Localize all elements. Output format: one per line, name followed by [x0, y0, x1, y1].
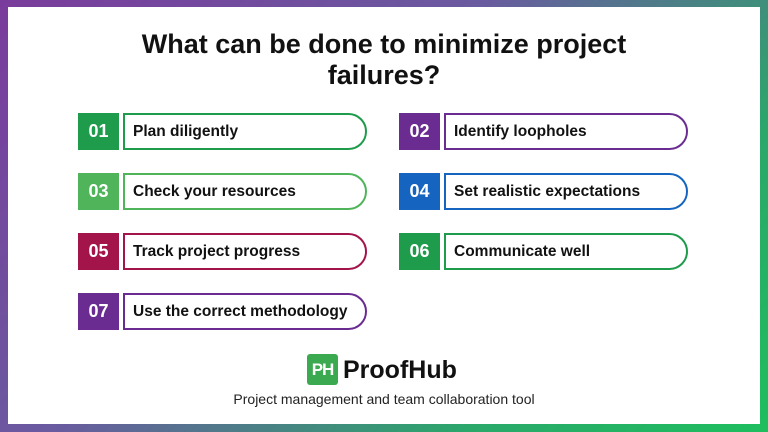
- item 05: Track project progress: [133, 243, 300, 260]
- item 05: 05: [88, 241, 109, 261]
- title: What can be done to minimize project: [142, 29, 626, 59]
- item 01: 01: [88, 121, 109, 141]
- item 06: 06: [409, 241, 430, 261]
- item 05: [78, 233, 367, 270]
- item 02: 02: [409, 121, 430, 141]
- item 06: [399, 233, 688, 270]
- title: failures?: [328, 60, 440, 90]
- icon: PH: PH: [312, 360, 333, 379]
- item 02: [399, 113, 688, 150]
- item 04: 04: [409, 181, 430, 201]
- icon: PH: [307, 354, 338, 385]
- item 02: Identify loopholes: [454, 123, 587, 140]
- logo text: ProofHub: [343, 356, 457, 384]
- item 03: 03: [88, 181, 109, 201]
- item 03: [78, 173, 367, 210]
- tagline: Project management and team collaboration tool: [233, 391, 535, 407]
- item 06: Communicate well: [454, 243, 590, 260]
- item 04: Set realistic expectations: [454, 183, 640, 200]
- item 03: Check your resources: [133, 183, 296, 200]
- item 07: [78, 293, 367, 330]
- item 01: [78, 113, 367, 150]
- title: [142, 29, 626, 90]
- item 07: Use the correct methodology: [133, 303, 347, 320]
- item 01: Plan diligently: [133, 123, 238, 140]
- logo: [307, 354, 457, 385]
- item 07: 07: [88, 301, 109, 321]
- item 04: [399, 173, 688, 210]
